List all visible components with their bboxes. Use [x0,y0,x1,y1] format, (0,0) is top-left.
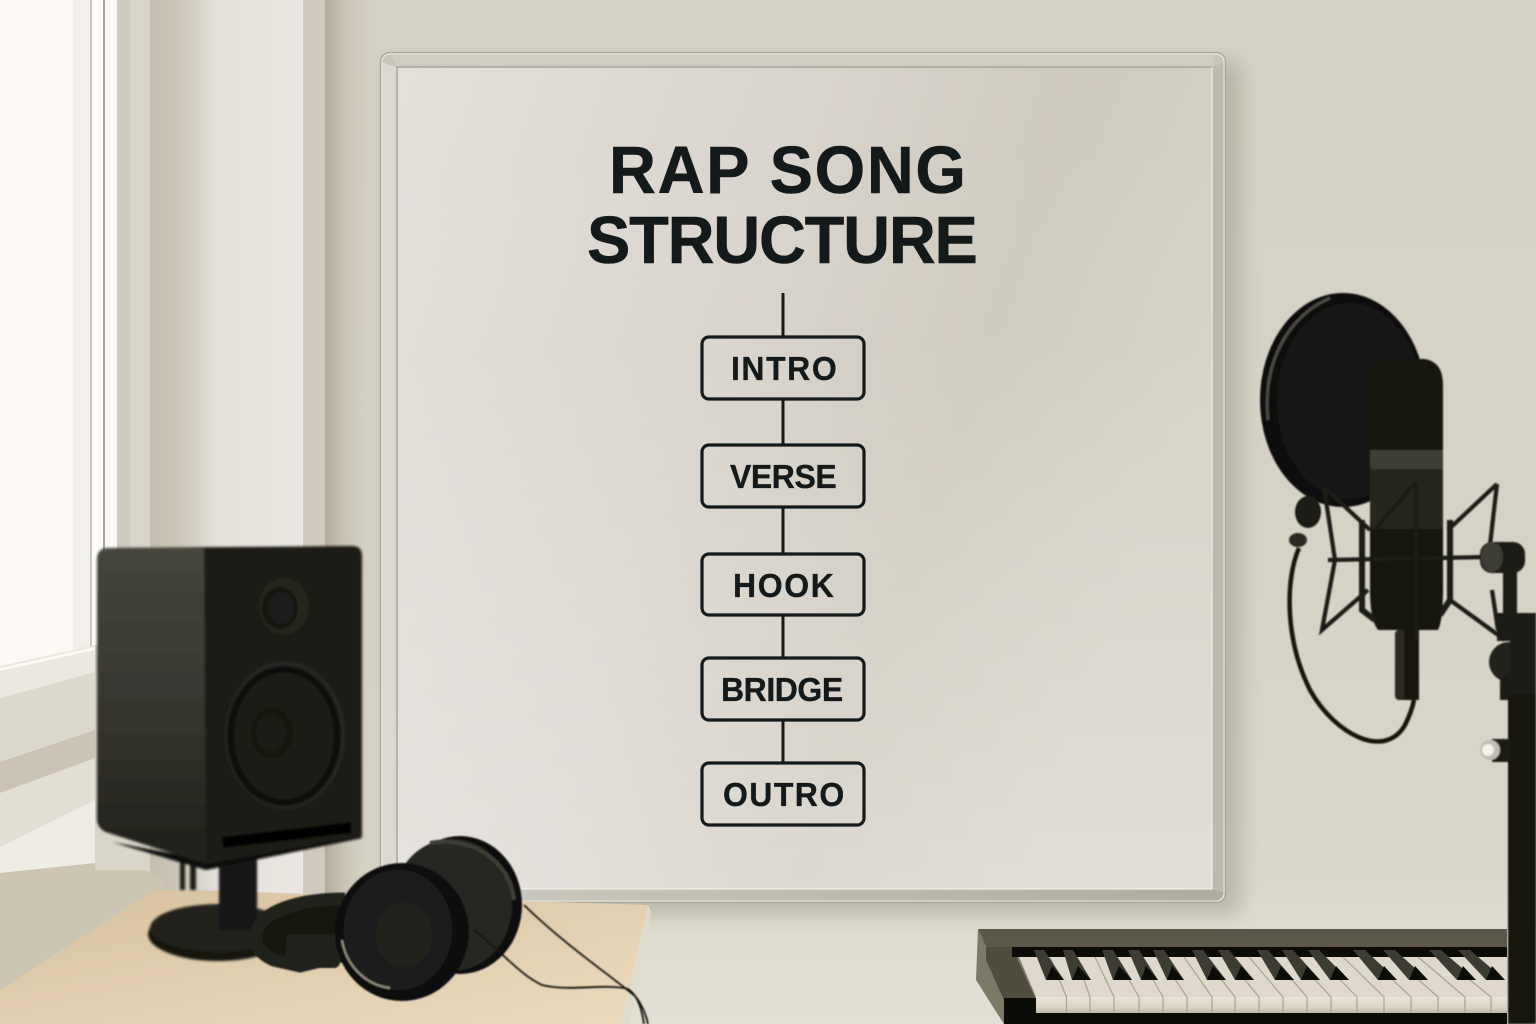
speaker woofer [225,661,345,809]
connector lines [782,293,784,763]
black key tips [1046,966,1505,980]
rear ear cup [398,836,522,974]
keyboard [976,929,1507,1024]
mic stand [1480,542,1536,1024]
box: bridge [702,658,864,720]
box: verse [702,445,864,507]
speaker cabinet [112,826,362,870]
title: STRUCTURE [587,202,978,277]
headband [256,899,345,966]
desk [0,889,651,1024]
box: outro: OUTRO [723,777,844,813]
microphone [1260,293,1536,1024]
white keys [1019,957,1507,1013]
black keys [1034,950,1505,980]
box: intro [702,337,864,399]
box: hook: HOOK [733,568,834,604]
title: RAP SONG [609,132,966,207]
box: intro: INTRO [731,351,837,387]
pop filter [1260,293,1426,507]
window reveal wall [150,0,325,900]
window with frame [0,0,150,700]
board shadow [388,62,1240,914]
box: bridge: BRIDGE [721,672,843,708]
flowchart: song sections [702,293,864,825]
box: outro [702,763,864,825]
speaker stand [148,858,288,961]
speaker [97,546,362,961]
poster board [380,52,1240,914]
shock mount [1322,482,1505,640]
keyboard casing [978,929,1507,947]
speaker port [222,822,351,848]
headphone cables [524,905,648,1024]
speaker tweeter [259,578,309,634]
box: verse: VERSE [730,459,837,495]
headphones [256,836,648,1024]
title [587,132,978,277]
pop filter gooseneck [1289,496,1414,741]
box: hook [702,554,864,615]
window sill [0,645,165,990]
microphone body [1370,359,1443,700]
front ear cup [335,863,469,1001]
